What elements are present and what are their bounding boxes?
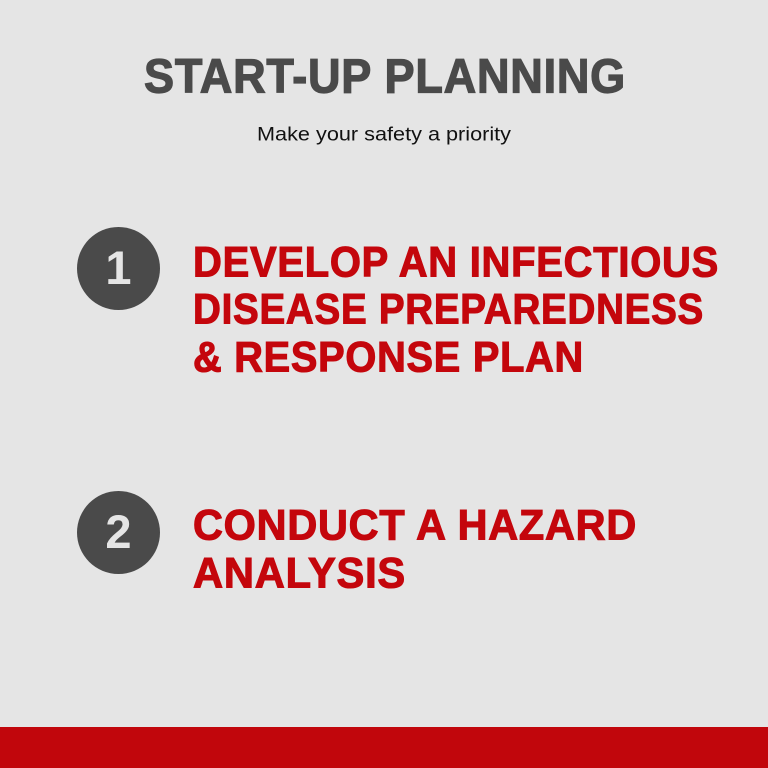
number badge 2: 2 [105, 505, 132, 558]
step 2 heading [193, 502, 637, 598]
number badge 1: 1 [105, 241, 132, 294]
step 1 heading: DEVELOP AN INFECTIOUS [193, 240, 719, 286]
step 2 heading: CONDUCT A HAZARD [193, 502, 637, 550]
step 1 heading: DISEASE PREPAREDNESS [193, 286, 704, 334]
title: START-UP PLANNING [144, 50, 626, 104]
number badge 1 [77, 227, 160, 310]
step 1 heading [193, 240, 719, 382]
number badge 2 [77, 491, 160, 574]
step 2 heading: ANALYSIS [193, 550, 406, 598]
subtitle: Make your safety a priority [257, 124, 511, 146]
footer bar [0, 727, 768, 768]
step 1 heading: & RESPONSE PLAN [193, 334, 584, 382]
